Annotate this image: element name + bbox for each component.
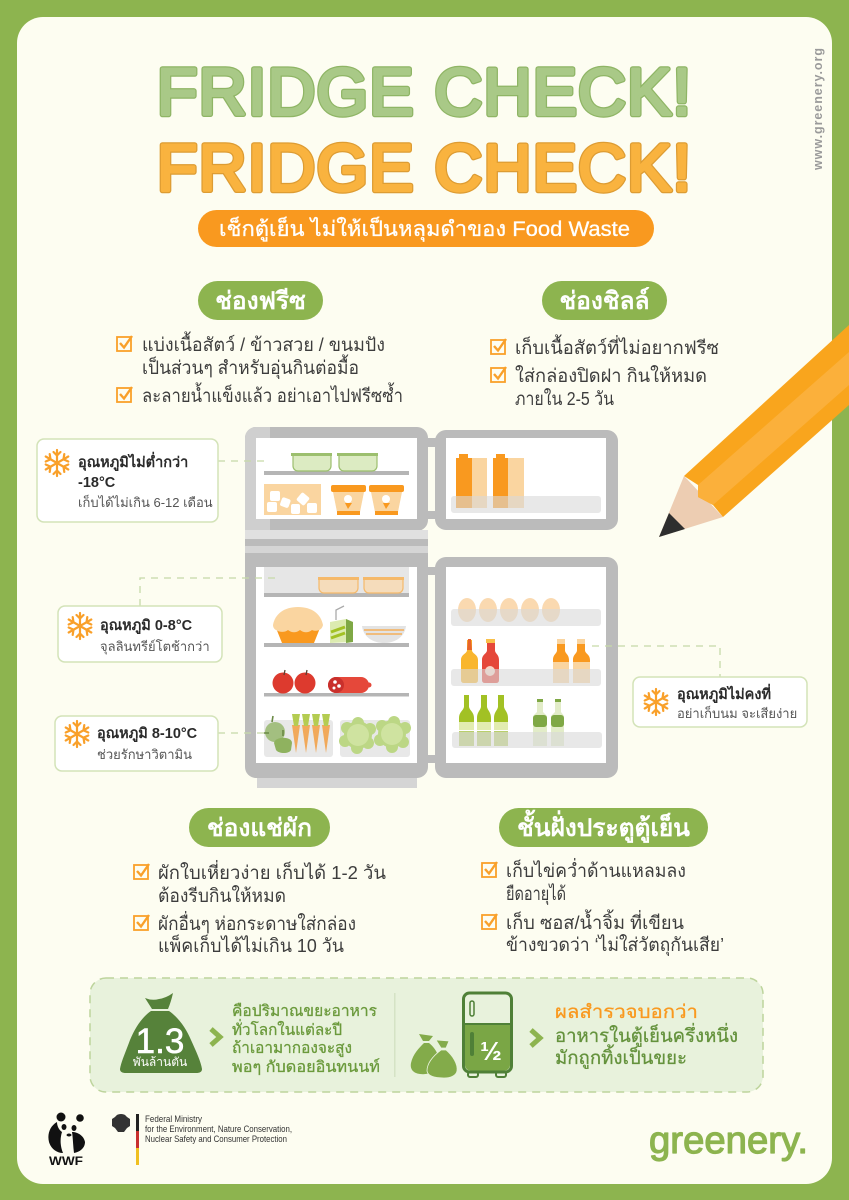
door shelf tips: ยืดอายุได้ — [506, 883, 566, 906]
icon: half fridge — [464, 993, 512, 1077]
chill tips — [491, 334, 719, 409]
eggs on door — [451, 598, 601, 626]
callout: chill temperature — [58, 606, 222, 662]
icon: waste bag: 1.3 — [136, 1022, 184, 1061]
heading: freezer: ช่องฟรีซ — [215, 287, 306, 315]
freezer tips: ละลายน้ำแข็งแล้ว อย่าเอาไปฟรีซซ้ำ — [142, 382, 403, 406]
fact text: survey: มักถูกทิ้งเป็นขยะ — [555, 1044, 687, 1069]
leader lines — [140, 461, 720, 733]
vegetable bins — [264, 714, 411, 757]
subtitle pill: เช็กตู้เย็น ไม่ให้เป็นหลุมดำของ Food Waste — [219, 215, 630, 242]
door shelf tips: เก็บ ซอส/น้ำจิ้ม ที่เขียน — [506, 909, 684, 933]
subtitle pill — [198, 210, 654, 247]
chill tips: ภายใน 2-5 วัน — [515, 388, 614, 409]
fact text: survey: อาหารในตู้เย็นครึ่งหนึ่ง — [555, 1023, 738, 1047]
freezer shelf items — [264, 453, 409, 475]
heading: chill: ช่องชิลล์ — [560, 287, 649, 315]
arrow — [211, 1029, 220, 1045]
callout: vegetable temperature: อุณหภูมิ 8-10°C — [97, 725, 198, 742]
heading: door shelves: ชั้นฝั่งประตูตู้เย็น — [517, 809, 690, 843]
freezer tips: แบ่งเนื้อสัตว์ / ข้าวสวย / ขนมปัง — [142, 331, 385, 355]
callout: chill temperature: จุลลินทรีย์โตช้ากว่า — [100, 639, 210, 655]
freezer tips: เป็นส่วนๆ สำหรับอุ่นกินต่อมื้อ — [142, 354, 359, 380]
fact text: mountain: คือปริมาณขยะอาหาร — [232, 1002, 377, 1020]
lower door — [435, 557, 618, 778]
callout: door temperature: อุณหภูมิไม่คงที่ — [677, 683, 771, 703]
vegetable tips: แพ็คเก็บได้ไม่เกิน 10 วัน — [158, 933, 344, 956]
logo: German federal ministry: Nuclear Safety and Consumer Protection — [145, 1134, 287, 1145]
callout: door temperature: อย่าเก็บนม จะเสียง่าย — [677, 704, 797, 721]
logo: greenery: greenery. — [649, 1120, 808, 1162]
title: FRIDGE CHECK! — [157, 130, 691, 204]
title — [157, 54, 691, 204]
upper door — [435, 430, 618, 530]
icon: waste bag: พันล้านตัน — [133, 1055, 187, 1069]
fact text: mountain: ถ้าเอามากองจะสูง — [232, 1040, 352, 1058]
pencil — [659, 325, 849, 537]
callout: freezer temperature: อุณหภูมิไม่ต่ำกว่า — [78, 451, 188, 471]
vegetable tips: ผักอื่นๆ ห่อกระดาษใส่กล่อง — [158, 911, 356, 934]
ice box — [264, 484, 321, 515]
drink bottles — [452, 695, 602, 748]
callout: vegetable temperature — [55, 716, 218, 771]
fridge middle band — [245, 530, 428, 553]
chill tips: ใส่กล่องปิดฝา กินให้หมด — [515, 365, 707, 386]
heading: vegetable drawer: ช่องแช่ผัก — [207, 815, 312, 842]
title: FRIDGE CHECK! — [157, 130, 691, 204]
ice cream tubs — [331, 485, 404, 515]
arrow — [531, 1030, 540, 1046]
heading: door shelves — [499, 808, 708, 847]
icon: waste bag — [120, 993, 202, 1073]
door shelf tips: เก็บไข่คว่ำด้านแหลมลง — [506, 858, 686, 881]
logo: German federal ministry — [112, 1114, 292, 1165]
callout: freezer temperature — [37, 439, 218, 522]
logo: WWF — [48, 1112, 85, 1168]
cartons on door — [451, 454, 601, 513]
logo: WWF: WWF — [49, 1154, 83, 1168]
fact text: survey: ผลสำรวจบอกว่า — [555, 1001, 698, 1022]
apples and sausage — [264, 670, 409, 696]
title: FRIDGE CHECK! — [157, 54, 691, 128]
chill tips: เก็บเนื้อสัตว์ที่ไม่อยากฟรีซ — [515, 334, 719, 358]
fact text: survey — [555, 1001, 738, 1069]
fridge — [245, 427, 618, 788]
website label: www.greenery.org — [811, 48, 825, 171]
freezer tips — [117, 331, 403, 406]
fact text: mountain — [232, 1002, 380, 1076]
door shelf tips — [482, 858, 724, 957]
door shelf tips: ข้างขวดว่า ‘ไม่ใส่วัตถุกันเสีย’ — [506, 934, 724, 957]
sauce bottles — [451, 639, 601, 686]
callout: door temperature — [633, 677, 807, 727]
callout: freezer temperature: -18°C — [78, 475, 116, 491]
pie, drink and bowl — [264, 606, 409, 647]
fact text: mountain: ทั่วโลกในแต่ละปี — [232, 1019, 342, 1039]
vegetable tips: ต้องรีบกินให้หมด — [158, 885, 286, 906]
heading: chill — [542, 281, 667, 320]
hinges — [427, 438, 436, 763]
logo: German federal ministry: Federal Ministry — [145, 1114, 202, 1125]
callout: vegetable temperature: ช่วยรักษาวิตามิน — [97, 747, 192, 762]
fridge body lower — [245, 553, 428, 788]
callout: chill temperature: อุณหภูมิ 0-8°C — [100, 617, 193, 634]
icon: small bags — [411, 1034, 457, 1078]
logo: German federal ministry: for the Environment, Nature Conservation, — [145, 1124, 292, 1135]
icon: half fridge: ½ — [480, 1036, 502, 1066]
facts panel — [90, 978, 763, 1092]
callout: freezer temperature: เก็บได้ไม่เกิน 6-12 เดือน — [78, 493, 213, 510]
fridge body upper — [245, 427, 428, 531]
heading: vegetable drawer — [189, 808, 330, 847]
vegetable tips: ผักใบเหี่ยวง่าย เก็บได้ 1-2 วัน — [158, 860, 386, 883]
chill shelf with containers — [264, 567, 409, 597]
title: FRIDGE CHECK! — [157, 54, 691, 128]
vegetable tips — [134, 860, 386, 956]
heading: freezer — [198, 281, 323, 320]
fact text: mountain: พอๆ กับดอยอินทนนท์ — [232, 1058, 380, 1076]
